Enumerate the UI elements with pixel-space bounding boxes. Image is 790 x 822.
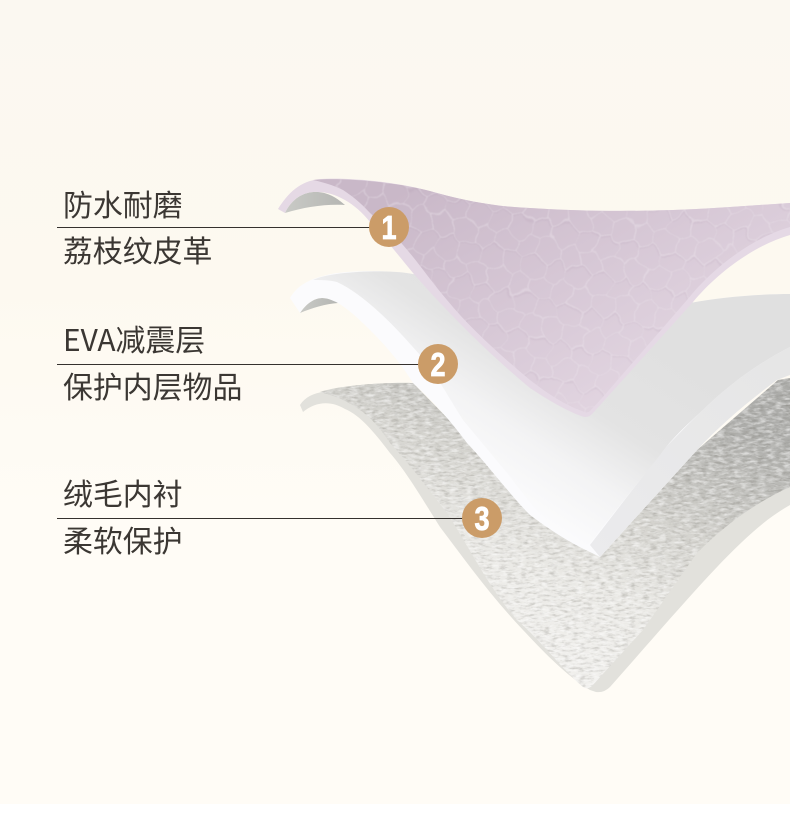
number badge 2: 2 [430, 348, 446, 384]
heading: 绒毛内衬: 绒毛内衬 [63, 470, 183, 514]
leather underside [285, 192, 345, 213]
number badge 3 [462, 498, 502, 538]
heading: 防水耐磨: 防水耐磨 [63, 181, 183, 225]
subtext: 柔软保护: 柔软保护 [63, 517, 183, 561]
leader line 2 [57, 364, 419, 365]
layer 2: EVA foam [290, 271, 790, 557]
callout 1 [57, 181, 409, 271]
heading: EVA减震层: EVA减震层 [63, 316, 205, 360]
leader line 3 [57, 518, 463, 519]
callout 3 [57, 470, 502, 561]
number badge 2 [418, 344, 458, 384]
fleece surface [300, 375, 790, 695]
number badge 3: 3 [474, 502, 490, 538]
leather edge band [278, 179, 790, 417]
callout 2 [57, 316, 458, 407]
layer 3: fleece lining [300, 375, 790, 695]
layer 1: pebbled leather [278, 178, 790, 417]
leather surface [314, 179, 790, 400]
foam edge band [290, 271, 790, 557]
subtext: 保护内层物品: 保护内层物品 [63, 363, 242, 407]
leader line 1 [57, 227, 371, 228]
fleece edge band [300, 378, 790, 692]
foam underside [300, 298, 338, 313]
number badge 1: 1 [381, 211, 397, 247]
foam surface [313, 271, 790, 545]
number badge 1 [369, 207, 409, 247]
subtext: 荔枝纹皮革: 荔枝纹皮革 [63, 227, 212, 271]
foam right band shade [590, 347, 790, 557]
